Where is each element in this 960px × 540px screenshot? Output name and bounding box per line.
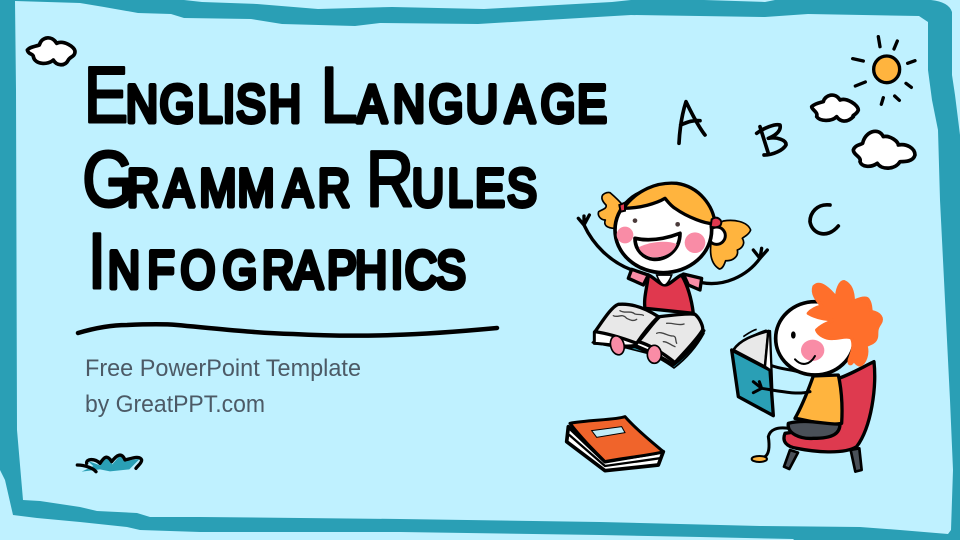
girl mouth: [635, 233, 680, 259]
boy head: [776, 302, 854, 375]
icon: closed orange book: [567, 417, 663, 471]
boy leg: [765, 428, 788, 457]
subtitle: Free PowerPoint Template: [85, 355, 361, 382]
title underline: [78, 324, 497, 336]
boy body: [795, 375, 842, 424]
chair legs: [784, 448, 862, 472]
girl dress: [645, 275, 693, 313]
book stack and cover: [592, 317, 704, 368]
left pigtail: [598, 192, 623, 228]
title: ANGUAGE: [357, 75, 607, 134]
title: I: [88, 218, 106, 305]
icon: cloud top left: [27, 38, 75, 65]
right pigtail: [711, 220, 751, 269]
boy far arm: [770, 365, 802, 373]
hair bows: [619, 203, 721, 227]
page lines: [569, 435, 659, 466]
title: NFOGRAPHICS: [108, 241, 466, 300]
girl ear: [708, 227, 725, 244]
title: E: [84, 52, 128, 139]
girl hair: [623, 183, 715, 224]
girl eyes: [633, 218, 680, 227]
title: L: [321, 52, 357, 139]
boy cheek: [801, 340, 824, 361]
large cloud: [853, 131, 915, 168]
illustration: boy reading on chair: [732, 282, 881, 472]
title: NGLISH: [126, 75, 316, 134]
girl collar: [657, 275, 672, 285]
boy near arm and hand: [753, 382, 810, 393]
book scribbles: [613, 311, 684, 347]
girl cheeks: [617, 227, 705, 253]
subtitle: by GreatPPT.com: [85, 391, 265, 418]
boy foot: [752, 456, 767, 462]
small cloud: [812, 95, 858, 121]
girl head: [615, 187, 712, 273]
title: RAMMAR: [127, 159, 361, 218]
title: ULES: [412, 159, 537, 218]
illustration: girl with open book: [578, 183, 767, 368]
girl feet: [608, 334, 661, 363]
title: R: [366, 136, 414, 223]
book pages: [595, 304, 703, 363]
icon: grass tuft: [77, 455, 142, 472]
chair: [784, 362, 875, 452]
subtitle: [85, 355, 361, 418]
sun: [853, 37, 915, 104]
girl arms: [578, 215, 767, 284]
boy book: [732, 329, 773, 416]
girl sleeves: [628, 269, 702, 290]
boy shorts: [788, 421, 840, 438]
boy hair: [808, 282, 881, 365]
hand-drawn letters A B C: [679, 102, 838, 234]
book cover: [570, 417, 663, 462]
boy smile: [795, 356, 815, 364]
boy eye: [791, 331, 796, 339]
cover label: [592, 427, 625, 437]
icon: sun and clouds top right: [812, 37, 915, 168]
book pages: [567, 427, 663, 471]
title: [82, 52, 607, 305]
title: G: [82, 136, 134, 223]
